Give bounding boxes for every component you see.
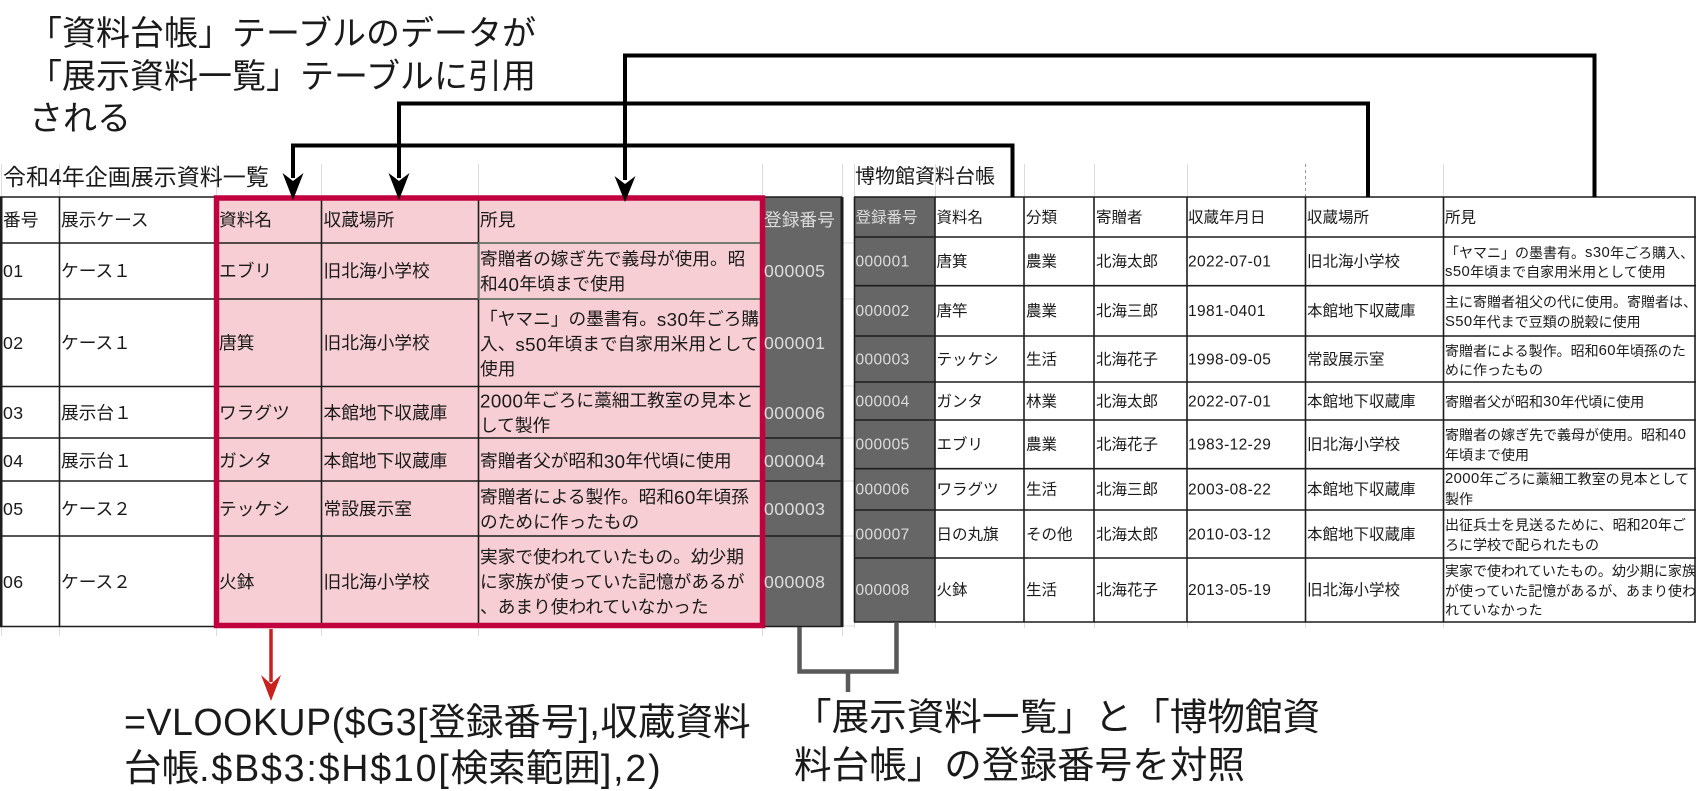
row 000008: 2013-05-19	[1188, 582, 1271, 599]
table title: 博物館資料台帳	[855, 165, 995, 188]
row 000006: ワラグツ	[936, 480, 999, 498]
row 06	[3, 547, 825, 617]
row 000002: 主に寄贈者祖父の代に使用。寄贈者は、	[1445, 294, 1697, 310]
selected cell outline	[479, 243, 762, 299]
row 03: ワラグツ	[219, 403, 290, 423]
row 05: のために作ったもの	[480, 512, 639, 532]
row 000006: 2000年ごろに藁細工教室の見本として	[1445, 471, 1689, 487]
row 000005	[856, 427, 1686, 463]
row 000007: 日の丸旗	[936, 526, 999, 544]
header row: 登録番号	[764, 210, 835, 230]
caption: VLOOKUP formula: 台帳.$B$3:$H$10[検索範囲],2)	[124, 747, 662, 789]
row 000007	[856, 517, 1686, 553]
caption: top annotation: される	[29, 100, 131, 138]
row 000003: 1998-09-05	[1188, 352, 1271, 368]
row 000008: 旧北海小学校	[1307, 581, 1401, 599]
header row: 所見	[480, 210, 515, 230]
row 000001: 旧北海小学校	[1307, 252, 1401, 270]
row 000008	[856, 563, 1696, 618]
caption: registration number comparison: 料台帳」の登録番号を対照	[794, 744, 1245, 786]
bracket: registration number comparison	[800, 622, 896, 692]
header row: 資料名	[936, 208, 983, 226]
row 000007: 出征兵士を見送るために、昭和20年ご	[1445, 517, 1686, 533]
row 000008: れていなかった	[1445, 602, 1543, 618]
header row: 番号	[3, 210, 38, 230]
red highlight frame	[216, 198, 762, 626]
row 04	[3, 450, 825, 472]
row 000008: 北海花子	[1096, 581, 1158, 599]
row 000005: 年頃まで使用	[1445, 447, 1529, 463]
row 000007: 本館地下収蔵庫	[1307, 526, 1416, 544]
row 04: 000004	[764, 451, 825, 471]
row 02: ケース１	[61, 333, 131, 353]
row 000005: 北海花子	[1096, 436, 1158, 454]
row 01: 000005	[764, 261, 825, 281]
row 000004: 2022-07-01	[1188, 394, 1271, 410]
row 000008: 生活	[1026, 581, 1057, 599]
registration number column	[762, 197, 842, 626]
row 000004: 北海太郎	[1096, 392, 1158, 410]
row 000005: 農業	[1026, 436, 1057, 454]
row 000005: 1983-12-29	[1188, 436, 1271, 454]
row 000001: 「ヤマニ」の墨書有。s30年ごろ購入、	[1445, 245, 1694, 261]
caption: VLOOKUP formula: =VLOOKUP($G3[登録番号],収蔵資料	[124, 701, 751, 743]
header row	[3, 210, 835, 230]
row 05: 常設展示室	[324, 499, 412, 519]
row 000006: 2003-08-22	[1188, 482, 1271, 498]
row 000006: 北海三郎	[1096, 480, 1158, 498]
row 000005: エブリ	[936, 434, 983, 454]
row 03: 03	[3, 403, 23, 423]
row 04: 展示台１	[61, 451, 132, 471]
caption: top annotation: 「資料台帳」テーブルのデータが	[28, 15, 536, 53]
row 000007: ろに学校で配られたもの	[1445, 537, 1599, 553]
row 02: 02	[3, 333, 23, 353]
row 000001: 2022-07-01	[1188, 254, 1271, 270]
row 000002: 農業	[1026, 302, 1057, 320]
row 000002: 唐竿	[936, 302, 968, 320]
row 03: 本館地下収蔵庫	[324, 403, 447, 423]
row 05: テッケシ	[219, 499, 290, 519]
row 02	[3, 308, 825, 379]
row 000001: 農業	[1026, 252, 1057, 270]
caption: top annotation: 「展示資料一覧」テーブルに引用	[28, 58, 536, 96]
row 000005: 寄贈者の嫁ぎ先で義母が使用。昭和40	[1445, 427, 1686, 443]
row 06: 旧北海小学校	[324, 572, 430, 592]
row 000004: 000004	[856, 394, 910, 410]
row 000006: 生活	[1026, 480, 1057, 498]
row 000002: S50年代まで豆類の脱穀に使用	[1445, 314, 1641, 330]
row 05: 05	[3, 499, 23, 519]
row 04: 寄贈者父が昭和30年代頃に使用	[480, 450, 732, 472]
header row: 収蔵年月日	[1188, 208, 1266, 226]
row 000008: 実家で使われていたもの。幼少期に家族	[1445, 563, 1696, 579]
row 02: 000001	[764, 333, 825, 353]
arrow: 所見	[614, 56, 1594, 202]
caption: registration number comparison	[794, 696, 1320, 786]
row 06: 000008	[764, 572, 825, 592]
row 000008: が使っていた記憶があるが、あまり使わ	[1445, 583, 1696, 599]
row 000003: 北海花子	[1096, 350, 1158, 368]
row 000005: 000005	[856, 436, 910, 454]
row 04: 本館地下収蔵庫	[324, 451, 447, 471]
row 000003	[856, 343, 1686, 378]
row 05: 寄贈者による製作。昭和60年頃孫	[480, 486, 749, 508]
row 000002: 北海三郎	[1096, 302, 1158, 320]
highlighted lookup columns	[216, 197, 762, 626]
caption: VLOOKUP formula	[124, 701, 751, 789]
table: 展示資料一覧	[0, 164, 842, 627]
header row: 所見	[1445, 208, 1476, 226]
row 000001: 000001	[856, 254, 910, 270]
row 03: 2000年ごろに藁細工教室の見本と	[480, 390, 753, 411]
row 06: 火鉢	[219, 572, 255, 592]
table: 博物館資料台帳	[854, 165, 1697, 622]
row 06: 実家で使われていたもの。幼少期	[480, 547, 744, 567]
row 02: 旧北海小学校	[324, 333, 430, 353]
row 02: 使用	[480, 359, 515, 379]
row 05	[3, 486, 825, 532]
row 000008: 000008	[856, 582, 910, 599]
arrow: 収蔵場所	[388, 104, 1368, 200]
row 000007: 000007	[856, 526, 910, 544]
arrow: to VLOOKUP formula	[261, 629, 281, 701]
header row: 資料名	[219, 210, 272, 230]
header row: 展示ケース	[61, 210, 149, 230]
row 000003: 生活	[1026, 350, 1057, 368]
registration number column	[854, 197, 935, 622]
header row	[856, 208, 1476, 226]
row 02: 唐箕	[219, 333, 254, 353]
row 03	[3, 390, 825, 436]
header row: 寄贈者	[1096, 208, 1143, 226]
row 06: に家族が使っていた記憶があるが	[480, 572, 745, 592]
row 01: 01	[3, 261, 23, 281]
row 000008: 火鉢	[936, 581, 968, 599]
row 000001: 唐箕	[936, 252, 968, 270]
row 02: 「ヤマニ」の墨書有。s30年ごろ購	[480, 308, 759, 330]
row 05: 000003	[764, 499, 825, 519]
row 000003: 常設展示室	[1307, 350, 1385, 368]
row 06: 06	[3, 572, 23, 592]
row 000006: 製作	[1445, 491, 1473, 507]
row 000003: めに作ったもの	[1445, 362, 1543, 378]
row 000001: 北海太郎	[1096, 252, 1158, 270]
row 03: 000006	[764, 403, 825, 423]
row 01: ケース１	[61, 261, 131, 281]
caption: registration number comparison: 「展示資料一覧」と「博物館資	[794, 696, 1320, 738]
row 01: 旧北海小学校	[324, 261, 430, 281]
row 000006	[856, 471, 1689, 507]
caption: top annotation	[28, 15, 536, 138]
row 000006: 000006	[856, 482, 910, 498]
row 000001	[856, 245, 1694, 280]
row 000003: 000003	[856, 352, 910, 368]
header row: 分類	[1026, 208, 1058, 226]
row 000004: 寄贈者父が昭和30年代頃に使用	[1445, 394, 1644, 410]
table title: 令和4年企画展示資料一覧	[3, 164, 269, 190]
row 01: 寄贈者の嫁ぎ先で義母が使用。昭	[480, 249, 745, 269]
row 05: ケース２	[61, 499, 131, 519]
arrow: 資料名	[282, 146, 1012, 200]
row 04: ガンタ	[219, 451, 272, 471]
row 000004: 林業	[1026, 392, 1057, 410]
row 000004	[856, 392, 1644, 410]
row 000005: 旧北海小学校	[1307, 436, 1401, 454]
row 000007: 2010-03-12	[1188, 526, 1271, 544]
row 01	[3, 249, 825, 294]
row 000007: その他	[1026, 526, 1073, 544]
row 000002	[856, 294, 1697, 330]
row 000002: 本館地下収蔵庫	[1307, 302, 1416, 320]
row 000004: 本館地下収蔵庫	[1307, 392, 1416, 410]
row 06: ケース２	[61, 572, 131, 592]
row 04: 04	[3, 451, 23, 471]
row 06: 、あまり使われていなかった	[480, 597, 709, 617]
row 000002: 000002	[856, 303, 910, 320]
row 03: 展示台１	[61, 403, 132, 423]
row 01: エブリ	[219, 260, 272, 281]
row 03: して製作	[480, 416, 550, 436]
row 000006: 本館地下収蔵庫	[1307, 480, 1416, 498]
row 02: 入、s50年頃まで自家用米用として	[480, 334, 759, 354]
row 000007: 北海太郎	[1096, 526, 1158, 544]
row 000002: 1981-0401	[1188, 303, 1266, 320]
header row: 収蔵場所	[324, 210, 395, 230]
row 000003: テッケシ	[936, 350, 999, 368]
header row: 収蔵場所	[1307, 208, 1369, 226]
header row: 登録番号	[856, 208, 918, 226]
row 000003: 寄贈者による製作。昭和60年頃孫のた	[1445, 343, 1686, 359]
row 000004: ガンタ	[936, 392, 983, 410]
row 01: 和40年頃まで使用	[480, 274, 626, 294]
row 000001: s50年頃まで自家用米用として使用	[1445, 264, 1666, 280]
